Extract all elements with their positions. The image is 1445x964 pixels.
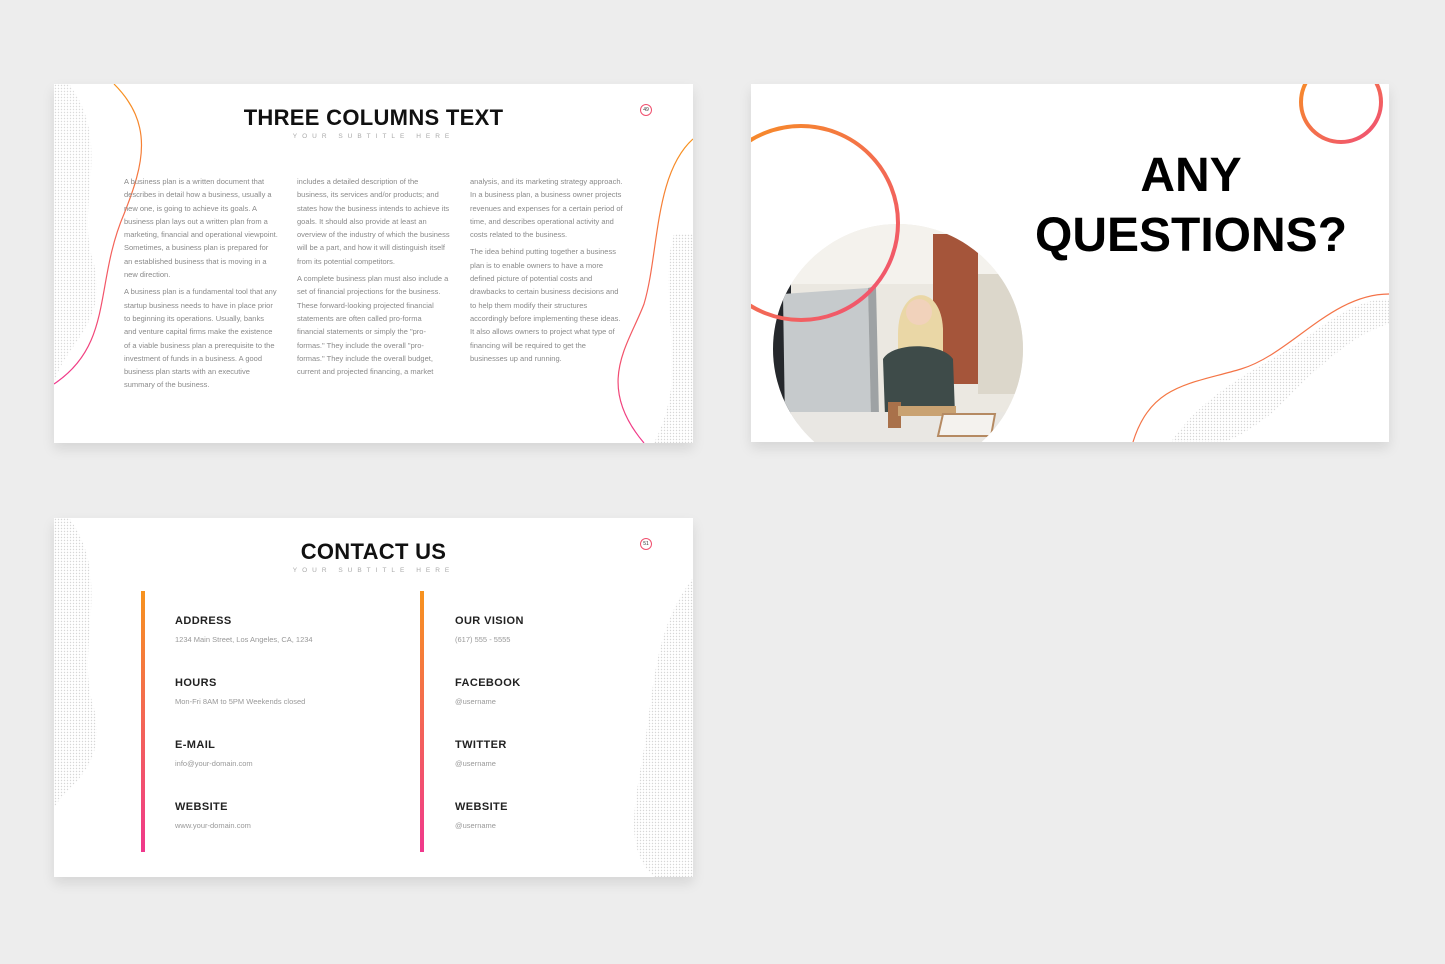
heading: CONTACT US [301,539,446,564]
panel: contact us slide: @username [455,759,496,768]
contact: email: E-MAIL [175,739,215,751]
panel: contact us slide [54,518,693,877]
panel: contact us slide: (617) 555 - 5555 [455,635,510,644]
decorative curves [54,84,693,443]
contact: twitter: TWITTER [455,739,507,751]
panel: contact us slide: www.your-domain.com [175,821,251,830]
panel: three columns text slide [54,84,693,443]
page number: 51 [643,541,649,547]
gradient bar right [420,591,424,852]
panel: contact us slide: 1234 Main Street, Los Angeles, CA, 1234 [175,635,313,644]
heading: THREE COLUMNS TEXT [244,105,503,130]
decorative rings [751,84,1383,322]
text column 2: includes a detailed description of the business, its services and/or products; and states how the business intends to achieve its goals. It should also provide at least an overview of the industry of which the business will be a part, and how it will distinguish itself from its potential competitors. [297,177,450,266]
panel: contact us slide: @username [455,697,496,706]
page number [640,538,652,550]
contact: website: WEBSITE [175,801,228,813]
photo: woman at computer [773,224,1023,442]
panel: any questions slide [751,84,1389,442]
decorative dots [54,518,692,877]
text column 3: analysis, and its marketing strategy approach. In a business plan, a business owner projects revenues and expenses for a certain period of time, and describes operational activity and costs related to the business. [470,177,623,239]
text column 1 [124,177,278,389]
page number: 49 [643,107,649,113]
panel: contact us slide: Mon-Fri 8AM to 5PM Weekends closed [175,697,305,706]
decorative wave [1132,293,1389,442]
heading: any questions [1035,149,1347,262]
panel: contact us slide: info@your-domain.com [175,759,253,768]
gradient bar left [141,591,145,852]
panel: contact us slide: @username [455,821,496,830]
subtitle: YOUR SUBTITLE HERE [293,567,454,574]
contact: website 2: WEBSITE [455,801,508,813]
text column 1: A business plan is a fundamental tool that any startup business needs to have in place prior to beginning its operations. Usually, banks and venture capital firms make the existence of a viable business plan a prerequisite to the investment of funds in a business. A good business plan starts with an executive summary of the business. [124,287,277,389]
text column 3 [470,177,623,363]
text column 2 [297,177,450,376]
text column 3: The idea behind putting together a business plan is to enable owners to have a more defined picture of potential costs and drawbacks to certain business decisions and to help them modify their structures accordingly before implementing these ideas. It also allows owners to project what type of financing will be required to get the businesses up and running. [470,247,621,363]
heading: any questions: ANY [1140,149,1242,202]
heading: any questions: QUESTIONS? [1035,209,1347,262]
contact: facebook: FACEBOOK [455,677,521,689]
contact: address: ADDRESS [175,615,232,627]
page number [640,104,652,116]
text column 2: A complete business plan must also include a set of financial projections for the business. These forward-looking projected financial statements are often called pro-forma financial statements or simply the "pro-formas." They include the overall "pro-formas." They include the overall budget, current and projected financing, a market [297,274,448,376]
contact: hours: HOURS [175,677,217,689]
text column 1: A business plan is a written document that describes in detail how a business, usually a new one, is going to achieve its goals. A business plan lays out a written plan from a marketing, financial and operational viewpoint. Sometimes, a business plan is prepared for an established business that is moving in a new direction. [124,177,278,279]
subtitle: YOUR SUBTITLE HERE [293,133,454,140]
contact: our vision: OUR VISION [455,615,524,627]
